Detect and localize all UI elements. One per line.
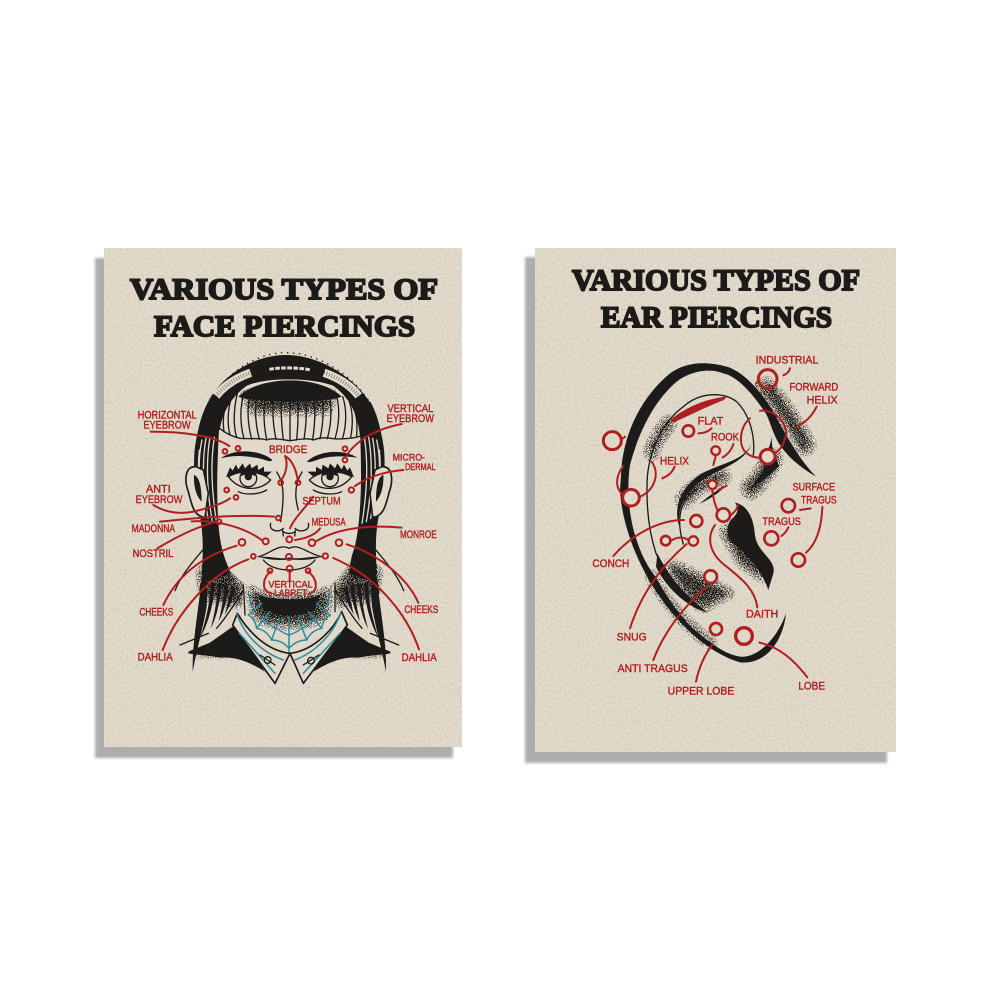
icon: helix rim (620, 363, 816, 663)
labels: ear: UPPER LOBE (668, 686, 735, 698)
labels: ear: SURFACE (793, 481, 835, 493)
title: ear piercings: EAR PIERCINGS (601, 301, 832, 334)
labels: face: ANTI (146, 484, 171, 496)
labels: face: VERTICAL (387, 403, 433, 415)
icon: head dome (207, 355, 371, 420)
concha line (680, 490, 695, 544)
labels: ear: LOBE (798, 681, 825, 693)
icon: bangs (219, 368, 361, 441)
labels: face: BRIDGE (269, 444, 308, 456)
labels: face: NOSTRIL (133, 548, 173, 560)
labels: face: MICRO- (393, 453, 425, 463)
labels: face: MEDUSA (312, 516, 346, 528)
labels: ear: SNUG (617, 631, 647, 643)
labels: face: VERTICAL (268, 580, 313, 590)
labels: ear: ANTI TRAGUS (618, 663, 688, 675)
panel: face piercings poster (104, 248, 462, 747)
chin solid shadow (258, 595, 320, 615)
icon: antihelix (677, 444, 752, 527)
illustration: ear (592, 355, 838, 698)
labels: face: EYEBROW (387, 413, 434, 425)
piercing rings: face (217, 446, 354, 573)
labels: ear: HELIX (807, 395, 838, 407)
labels: ear: FORWARD (789, 381, 838, 393)
poster shadow: ear (525, 257, 887, 763)
icon: collar (233, 612, 347, 683)
labels: face: LABRET (274, 588, 308, 598)
icon: left eye (226, 463, 272, 494)
labels: ear: TRAGUS (762, 516, 801, 528)
icon: right eye (307, 463, 354, 494)
labels: face: CHEEKS (404, 604, 439, 616)
labels: face: CHEEKS (139, 606, 174, 618)
labels: face: DERMAL (405, 462, 436, 472)
panel: ear piercings poster (535, 248, 896, 752)
red callout lines: ear (613, 368, 822, 682)
labels: ear: DAITH (746, 609, 778, 621)
labels: face (132, 403, 439, 664)
labels: ear: ROOK (711, 431, 739, 443)
icon: eyebrows (221, 451, 357, 462)
icon: spiderweb tattoo (248, 593, 330, 653)
red callout lines: face (151, 424, 419, 650)
labels: ear: FLAT (698, 416, 723, 428)
labels: ear: HELIX (660, 455, 689, 467)
labels: face: EYEBROW (143, 420, 191, 432)
red flat bar (671, 397, 727, 423)
icon: concha (727, 503, 774, 590)
labels: ear (592, 355, 838, 698)
antihelix inner stroke (699, 485, 727, 504)
icon: ears (186, 467, 392, 517)
icon: lips (257, 547, 323, 570)
labels: face: DAHLIA (138, 651, 173, 663)
piercing rings: ear (603, 370, 805, 644)
icon: headband (216, 373, 359, 396)
chin shadow (248, 587, 332, 625)
labels: face: HORIZONTAL (138, 410, 197, 422)
icon: inner helix fold (647, 395, 754, 612)
comb teeth (209, 353, 369, 402)
labels: ear: INDUSTRIAL (756, 355, 818, 367)
labels: face: EYEBROW (136, 494, 183, 506)
title: face piercings: FACE PIERCINGS (154, 310, 415, 343)
icon: hair and shoulders (175, 402, 404, 672)
labels: face: MONROE (400, 529, 437, 541)
poster shadow: face (95, 258, 453, 758)
title: face piercings (130, 273, 438, 343)
labels: face: DAHLIA (402, 652, 437, 664)
illustration: face (132, 353, 439, 683)
icon: face shape (217, 430, 361, 598)
title: ear piercings (572, 264, 860, 334)
stippled ear shading (650, 383, 808, 645)
neck (242, 583, 337, 655)
labels: face: MADONNA (132, 523, 175, 535)
labels: face: SEPTUM (302, 495, 341, 507)
neck outline (243, 583, 335, 615)
title: ear piercings: VARIOUS TYPES OF (572, 264, 860, 297)
labels: ear: CONCH (592, 558, 629, 570)
icon: spike shadow (748, 433, 779, 490)
icon: nose (270, 472, 309, 536)
title: face piercings: VARIOUS TYPES OF (130, 273, 438, 306)
icon: antiscaphal shadow (656, 553, 705, 612)
labels: ear: TRAGUS (801, 495, 837, 507)
